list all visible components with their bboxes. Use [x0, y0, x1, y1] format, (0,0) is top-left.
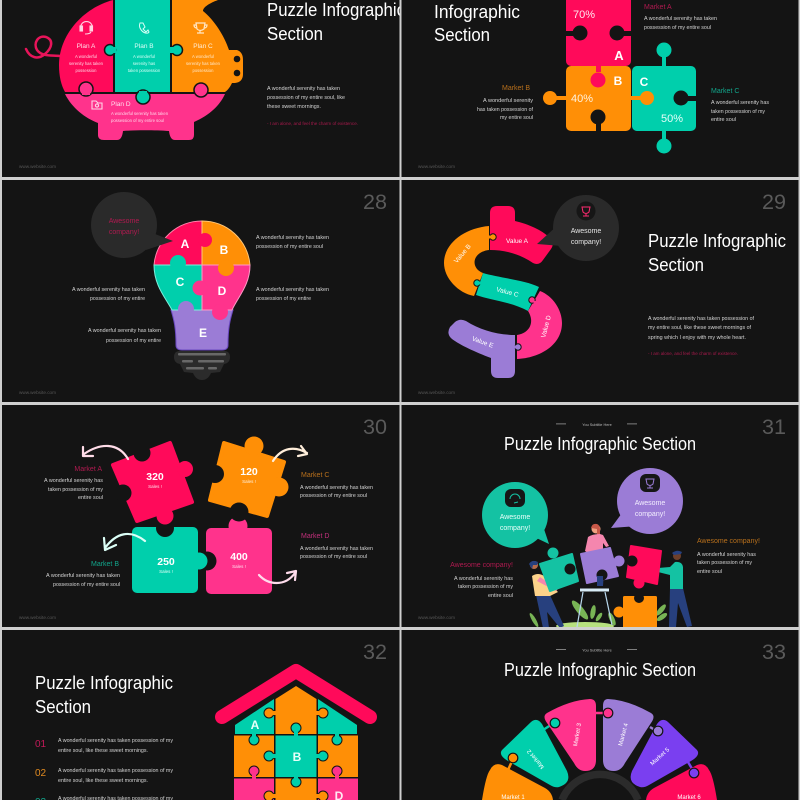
semicircle chart [482, 699, 717, 800]
body text [267, 86, 345, 110]
title: Puzzle Infographic [35, 673, 173, 693]
piece 400 [198, 516, 272, 594]
arrow: market A [83, 446, 128, 459]
piece D: D [218, 284, 227, 298]
subtitle [556, 423, 637, 427]
list item 02 [35, 768, 173, 784]
roof [222, 671, 370, 717]
value E: Value E [471, 335, 495, 350]
website: www.website.com [19, 390, 56, 395]
piece D [178, 233, 250, 320]
puzzle piece C: 50% [661, 113, 683, 125]
page number: 28 [363, 191, 387, 214]
plants [528, 599, 668, 630]
arrow: market B [104, 534, 145, 550]
piece 120: Sales ! [242, 479, 256, 484]
label: market C: A wonderful serenity has taken [300, 485, 373, 491]
puzzle piece C: C [640, 75, 649, 89]
speech bubble [537, 195, 619, 261]
title: Puzzle Infographic Section [504, 660, 696, 680]
title: Section [434, 25, 490, 45]
icon: trophy [194, 23, 207, 33]
website: www.website.com [418, 390, 455, 395]
snout nostrils [234, 56, 240, 76]
website: www.website.com [418, 615, 455, 620]
quote: - I am alone, and feel the charm of existence. [267, 121, 358, 126]
arrow: market C [273, 446, 307, 461]
list item 01 [35, 738, 173, 754]
label: market B [46, 561, 120, 588]
text: middle left [72, 287, 145, 302]
label: market B: A wonderful serenity [483, 98, 533, 104]
puzzle piece B: 40% [571, 93, 593, 105]
text: lower left: possession of my entire [106, 338, 161, 344]
label: plan A: Plan A [77, 43, 96, 50]
page number: 31 [762, 416, 786, 439]
piece 250 [132, 519, 208, 593]
label: plan C: serenity has taken [186, 61, 221, 66]
panel: market puzzle slide [401, 0, 800, 177]
label: plan D: Plan D [111, 101, 131, 108]
text: top right [256, 235, 329, 250]
row 3 pieces [234, 778, 358, 800]
icon: trophy [576, 202, 596, 220]
label: market C: entire soul [711, 117, 736, 123]
page number: 30 [363, 416, 387, 439]
puzzle piece C [632, 42, 697, 154]
label: plan C: A wonderful [192, 54, 214, 59]
letters: B [293, 750, 302, 764]
label: awesome left: Awesome company! [450, 562, 513, 569]
piece B: B [220, 243, 229, 257]
piece B [202, 221, 250, 265]
label: market C [711, 88, 769, 123]
piece C [154, 255, 202, 310]
speech bubble: Awesome [109, 218, 139, 225]
market 4: Market 4 [618, 722, 630, 747]
label: market C: Market C [711, 88, 739, 95]
title [434, 4, 520, 41]
speech bubble: teal: company! [500, 525, 530, 532]
text: middle right: A wonderful serenity has taken [256, 287, 329, 293]
value C [476, 273, 539, 311]
arrow: market D [259, 571, 296, 583]
list item 02: 02 [35, 768, 47, 779]
panel: dollar sign slide 29 [401, 180, 800, 402]
stool [577, 588, 612, 627]
label: market B [477, 85, 534, 121]
label: market C: A wonderful serenity has [711, 100, 769, 106]
subtitle: You Subtitle Here [582, 648, 612, 652]
label: plan C [186, 43, 221, 73]
piece: plan D [65, 94, 225, 140]
center ring [562, 774, 638, 800]
label: plan B: taken possession [128, 68, 161, 73]
text: top right: possession of my entire soul [256, 244, 323, 250]
label: market C: taken possession of my [711, 109, 765, 115]
piece: plan B [115, 0, 170, 92]
label: market A [44, 466, 103, 501]
piece A [154, 221, 202, 265]
list item 02: entire soul, like these sweet mornings. [58, 778, 148, 784]
page number: 29 [762, 191, 786, 214]
value A [490, 206, 553, 264]
piece: plan C [172, 0, 243, 92]
speech bubble: company! [109, 229, 139, 236]
website: www.website.com [19, 164, 56, 169]
title [648, 231, 786, 275]
piece E: E [199, 326, 207, 340]
list item 01: entire soul, like these sweet mornings. [58, 748, 148, 754]
market 1 [482, 764, 553, 800]
puzzle piece purple [581, 548, 624, 584]
puzzle piece teal [540, 548, 578, 591]
value D: Value D [540, 314, 553, 338]
puzzle piece A: A [614, 48, 624, 63]
title: Section [35, 697, 91, 717]
label: market A: A wonderful serenity has taken [644, 16, 717, 22]
label: plan D: possession of my entire soul [111, 118, 164, 123]
label: market C: possession of my entire soul [300, 493, 367, 499]
body text: these sweet mornings. [267, 104, 321, 110]
subtitle [556, 648, 637, 652]
label: market B: my entire soul [500, 115, 533, 121]
value E [448, 320, 515, 378]
label: market D [300, 533, 373, 560]
value C: Value C [496, 286, 520, 299]
market 5: Market 5 [650, 747, 672, 767]
house puzzle [222, 671, 370, 800]
label: awesome right: taken possession of my [697, 560, 752, 566]
speech bubble: Awesome [571, 228, 601, 235]
connector lines [508, 713, 694, 772]
body text: A wonderful serenity has taken possession of [648, 316, 755, 322]
label: market B: Market B [502, 85, 530, 92]
label: plan B: serenity has [133, 61, 155, 66]
speech bubble: purple: company! [635, 511, 665, 518]
piece 320 [113, 443, 193, 524]
piece 320: 320 [146, 471, 164, 483]
puzzle tabs [474, 234, 537, 350]
puzzle piece orange [614, 593, 657, 632]
label: awesome right: Awesome company! [697, 538, 760, 545]
label: market D: Market D [301, 533, 329, 540]
label: plan D: A wonderful serenity has taken [111, 111, 169, 116]
speech bubble: teal [482, 482, 549, 548]
title [35, 673, 173, 717]
market 6 [646, 764, 717, 800]
piece C: C [176, 275, 185, 289]
label: plan A: possession [76, 68, 97, 73]
title: Puzzle Infographic [648, 231, 786, 251]
puzzle piece A [566, 0, 631, 66]
puzzle piece A: 70% [573, 9, 595, 21]
label: market A: A wonderful serenity has [44, 478, 103, 484]
speech bubble: purple [611, 468, 683, 534]
list item 02: A wonderful serenity has taken possession of my [58, 768, 173, 774]
label: market A: Market A [644, 4, 672, 11]
pig tail [26, 37, 60, 57]
panel: people with puzzle slide 31 [401, 405, 800, 632]
piece 320: Sales ! [148, 484, 162, 489]
label: market A [644, 4, 717, 31]
value A: Value A [506, 238, 529, 245]
title: Infographic [434, 2, 520, 22]
body text [648, 316, 755, 341]
label: plan C: Plan C [193, 43, 213, 50]
value D [517, 291, 562, 359]
speech bubble: company! [571, 239, 601, 246]
label: awesome left: A wonderful serenity has [454, 576, 513, 582]
row 1 pieces [235, 686, 357, 734]
market 2 [501, 720, 568, 787]
website: www.website.com [19, 615, 56, 620]
label: market A: Market A [74, 466, 102, 473]
piece 120 [206, 436, 288, 522]
connector knobs [508, 708, 699, 778]
body text: possession of my entire soul, like [267, 95, 345, 101]
puzzle tabs [249, 708, 342, 800]
list item 01: 01 [35, 739, 47, 750]
speech bubble [91, 192, 173, 258]
letters: A [251, 718, 260, 732]
label: awesome right: A wonderful serenity has [697, 552, 756, 558]
piggy bank puzzle [26, 0, 243, 140]
list item 01: A wonderful serenity has taken possession of my [58, 738, 173, 744]
man left [529, 561, 564, 628]
title: Puzzle Infographic Section [504, 434, 696, 454]
speech bubble: teal: Awesome [500, 514, 530, 521]
label: market B: possession of my entire soul [53, 582, 120, 588]
speech bubble: purple: Awesome [635, 500, 665, 507]
row 2 pieces [234, 736, 358, 777]
label: awesome right: entire soul [697, 569, 722, 575]
letters [251, 718, 344, 800]
man right [658, 551, 692, 627]
label: market A: possession of my entire soul [644, 25, 711, 31]
label: plan B [128, 43, 161, 73]
icon: phone [140, 23, 149, 33]
panel: piggy bank slide [2, 0, 405, 177]
light bulb puzzle [154, 221, 250, 380]
text: middle right [256, 287, 329, 302]
icon: headset [505, 489, 525, 507]
panel: house slide 32 [2, 630, 400, 800]
text: lower left [88, 328, 161, 344]
page number: 33 [762, 641, 786, 664]
label: market A: taken possession of my [48, 487, 103, 493]
puzzle piece red [626, 546, 661, 588]
market 2: Market 2 [526, 747, 546, 770]
panel: four puzzle pieces slide 30 [2, 405, 400, 627]
label: plan A [69, 43, 104, 73]
label: market B: A wonderful serenity has taken [46, 573, 120, 579]
page number: 32 [363, 641, 387, 664]
label: market D: A wonderful serenity has taken [300, 546, 373, 552]
title: Section [267, 24, 323, 44]
market 3: Market 3 [573, 722, 583, 747]
label: market C [300, 472, 373, 499]
label: awesome right [697, 538, 760, 575]
piece 400: 400 [230, 551, 248, 563]
label: awesome left: entire soul [488, 593, 513, 599]
body text: A wonderful serenity has taken [267, 86, 340, 92]
label: awesome left [450, 562, 513, 599]
dollar sign puzzle [444, 206, 562, 378]
title: Puzzle Infographic [267, 0, 405, 20]
label: plan D [111, 101, 169, 123]
piece 400: Sales ! [232, 564, 246, 569]
label: market B: has taken possession of [477, 107, 534, 113]
label: market A: entire soul [78, 495, 103, 501]
subtitle: You Subtitle Here [582, 423, 612, 427]
panel: light bulb slide 28 [2, 180, 400, 402]
label: plan C: possession [193, 68, 214, 73]
panel: semicircle markets slide 33 [401, 630, 800, 800]
label: market D: possession of my entire soul [300, 554, 367, 560]
market 5 [631, 720, 698, 787]
icon: folder [92, 101, 102, 109]
text: middle right: possession of my entire [256, 296, 311, 302]
text: lower left: A wonderful serenity has taken [88, 328, 161, 334]
piece: plan A [59, 0, 113, 92]
market 4 [603, 699, 654, 771]
body text: my entire soul, like these sweet mornings of [648, 325, 752, 331]
label: plan B: Plan B [134, 43, 154, 50]
quote: - I am alone, and feel the charm of existence. [648, 351, 738, 356]
base [174, 351, 230, 380]
puzzle tabs [79, 44, 208, 104]
value B [444, 226, 489, 296]
illustration: people assembling puzzle [528, 524, 692, 632]
label: plan B: A wonderful [133, 54, 155, 59]
market 3 [544, 699, 596, 771]
label: market B: Market B [91, 561, 119, 568]
puzzle piece B: B [614, 74, 623, 88]
label: plan A: serenity has taken [69, 61, 104, 66]
label: awesome left: taken possession of my [458, 584, 513, 590]
title [268, 2, 400, 40]
text: middle left: possession of my entire [90, 296, 145, 302]
label: plan A: A wonderful [75, 54, 97, 59]
text: top right: A wonderful serenity has taken [256, 235, 329, 241]
piece A: A [181, 237, 190, 251]
woman [585, 524, 609, 586]
puzzle piece B [543, 62, 654, 132]
label: market C: Market C [301, 472, 329, 479]
body text: spring which I enjoy with my whole heart. [648, 335, 746, 341]
title: Section [648, 255, 704, 275]
text: middle left: A wonderful serenity has taken [72, 287, 145, 293]
value B: Value B [453, 243, 473, 265]
website: www.website.com [418, 164, 455, 169]
icon: headset [80, 22, 93, 34]
icon: trophy [640, 474, 660, 492]
piece 250: 250 [157, 556, 175, 568]
piece 250: Sales ! [159, 569, 173, 574]
piece 120: 120 [240, 466, 258, 478]
piece E [171, 310, 233, 350]
